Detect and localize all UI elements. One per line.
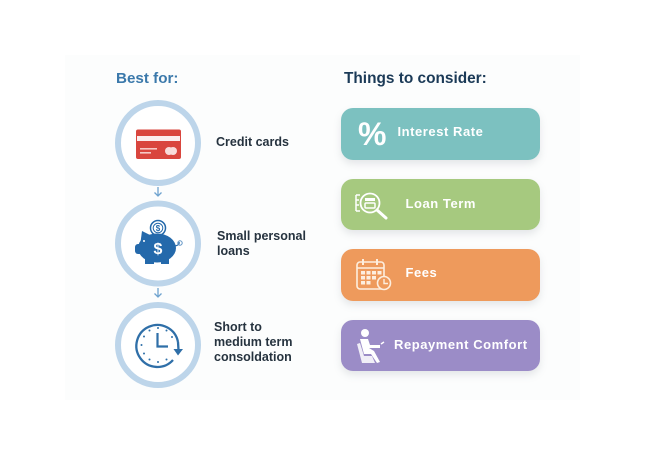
label: small personal loans: [217, 229, 306, 258]
card label: repayment comfort: Repayment Comfort: [394, 336, 528, 352]
card: interest rate: [341, 108, 540, 160]
card: loan term: [341, 178, 540, 230]
card label: loan term: Loan Term: [406, 196, 476, 210]
icon: clock with arrow: [136, 325, 183, 367]
heading: best for: Best for:: [116, 70, 178, 87]
icon: magnifier over document: [355, 192, 388, 220]
heading: things to consider: Things to consider:: [344, 70, 487, 87]
card label: interest rate: Interest Rate: [398, 124, 483, 139]
card: fees: [341, 249, 540, 300]
circle: credit cards: [118, 103, 198, 183]
icon: piggy bank with coin: $: [154, 241, 163, 258]
icon: person in seat: [357, 329, 384, 363]
label: credit cards: Credit cards: [216, 134, 289, 148]
label: small personal loans: loans: [217, 244, 250, 258]
card label: fees: Fees: [406, 265, 437, 280]
label: short to medium term consolidation: Short to: [214, 320, 262, 334]
icon: calendar with clock: [356, 259, 392, 290]
icon: percent: %: [358, 116, 386, 152]
label: short to medium term consolidation: consoldation: [214, 350, 292, 364]
background panel: [65, 55, 580, 400]
label: small personal loans: Small personal: [217, 229, 306, 243]
card: repayment comfort: [341, 320, 540, 371]
circle: short to medium term: [118, 305, 198, 385]
icon: credit card: [136, 130, 181, 159]
label: short to medium term consolidation: [214, 320, 292, 364]
arrow: credit cards to loans: [154, 187, 162, 196]
icon: piggy bank with coin: [135, 220, 182, 264]
label: short to medium term consolidation: medium term: [214, 335, 292, 349]
circle: small personal loans: [118, 204, 198, 284]
arrow: loans to consolidation: [154, 288, 162, 297]
icon: piggy bank with coin: $: [156, 224, 161, 233]
